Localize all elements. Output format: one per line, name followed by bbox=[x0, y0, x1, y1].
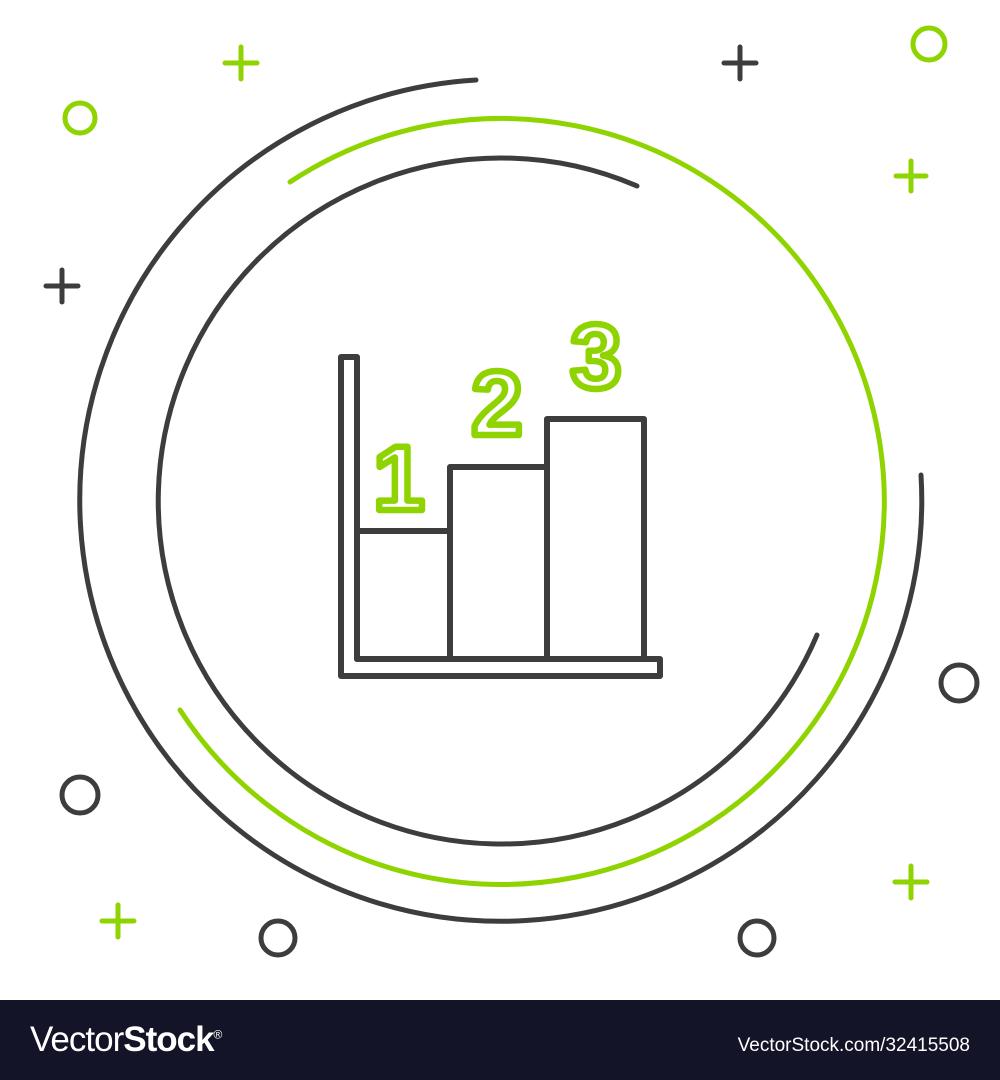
bar 2 bbox=[450, 467, 547, 659]
bar chart bbox=[341, 357, 660, 676]
chart numbers: 1 bbox=[373, 428, 425, 530]
footer logo: VectorStock® bbox=[30, 1020, 221, 1059]
bar 1 bbox=[357, 531, 450, 659]
chart numbers: 2 bbox=[471, 353, 523, 455]
decorative circles bbox=[62, 28, 977, 955]
decorative plus signs bbox=[46, 47, 927, 937]
footer url: VectorStock.com/32415508 bbox=[738, 1035, 970, 1056]
chart axes bbox=[341, 357, 660, 676]
inner dark ring arc bbox=[158, 158, 817, 844]
green ring arc bbox=[180, 118, 884, 884]
outer dark ring arc bbox=[80, 80, 922, 921]
footer bar bbox=[0, 1000, 1000, 1080]
chart numbers: 3 bbox=[570, 306, 622, 408]
chart numbers bbox=[373, 306, 622, 530]
bar 3 bbox=[547, 419, 644, 659]
